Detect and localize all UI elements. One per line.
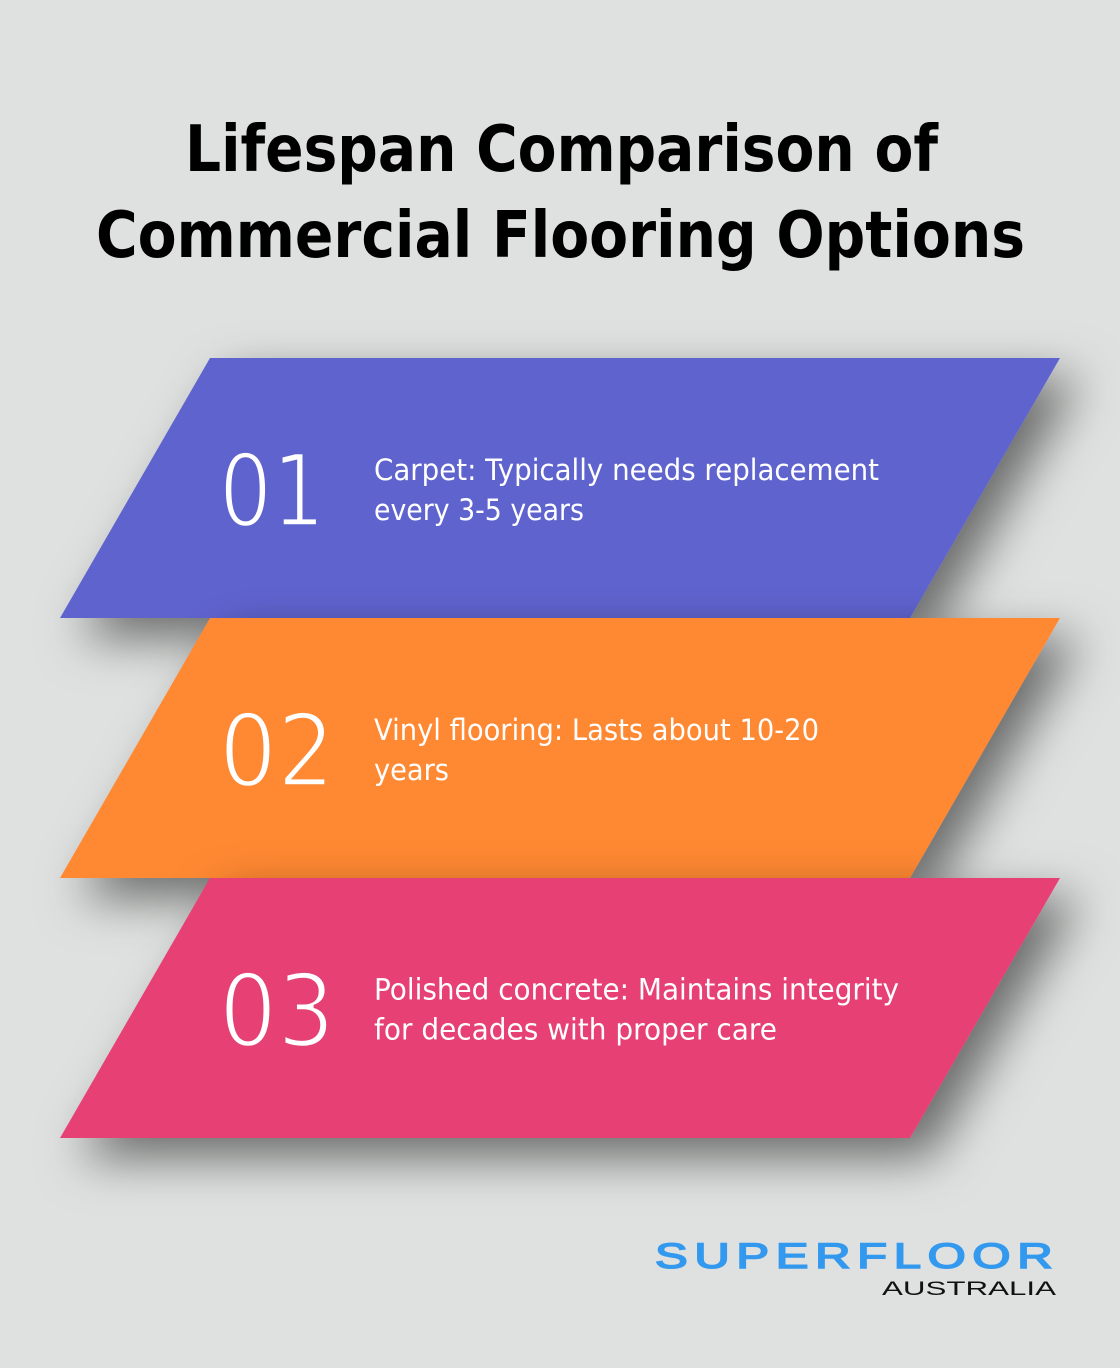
panel: vinyl <box>60 618 1060 878</box>
text: carpet lifespan <box>374 453 879 527</box>
panel: polished concrete <box>60 878 1060 1138</box>
title <box>96 113 1025 273</box>
text: carpet lifespan: every 3-5 years <box>374 493 584 527</box>
text: vinyl lifespan <box>374 713 819 787</box>
shape: blue parallelogram <box>60 358 1060 618</box>
panel: carpet <box>60 358 1060 618</box>
title: Lifespan Comparison of <box>185 113 939 187</box>
number 02: 02 <box>219 692 335 810</box>
logo: Superfloor Australia <box>655 1237 1056 1300</box>
text: concrete lifespan: Polished concrete: Maintains integrity <box>374 972 899 1006</box>
shape: orange parallelogram <box>60 618 1060 878</box>
text: carpet lifespan: Carpet: Typically needs replacement <box>374 453 879 487</box>
number 01: 01 <box>219 432 325 550</box>
logo: Superfloor Australia: AUSTRALIA <box>882 1278 1056 1300</box>
text: vinyl lifespan: years <box>374 753 449 787</box>
number 03: 03 <box>219 952 335 1070</box>
logo: Superfloor Australia: SUPERFLOOR <box>655 1237 1053 1276</box>
title: Commercial Flooring Options <box>96 199 1025 273</box>
text: vinyl lifespan: Vinyl flooring: Lasts about 10-20 <box>374 713 819 747</box>
text: concrete lifespan: for decades with proper care <box>374 1012 777 1046</box>
text: concrete lifespan <box>374 972 899 1046</box>
shape: pink parallelogram <box>60 878 1060 1138</box>
